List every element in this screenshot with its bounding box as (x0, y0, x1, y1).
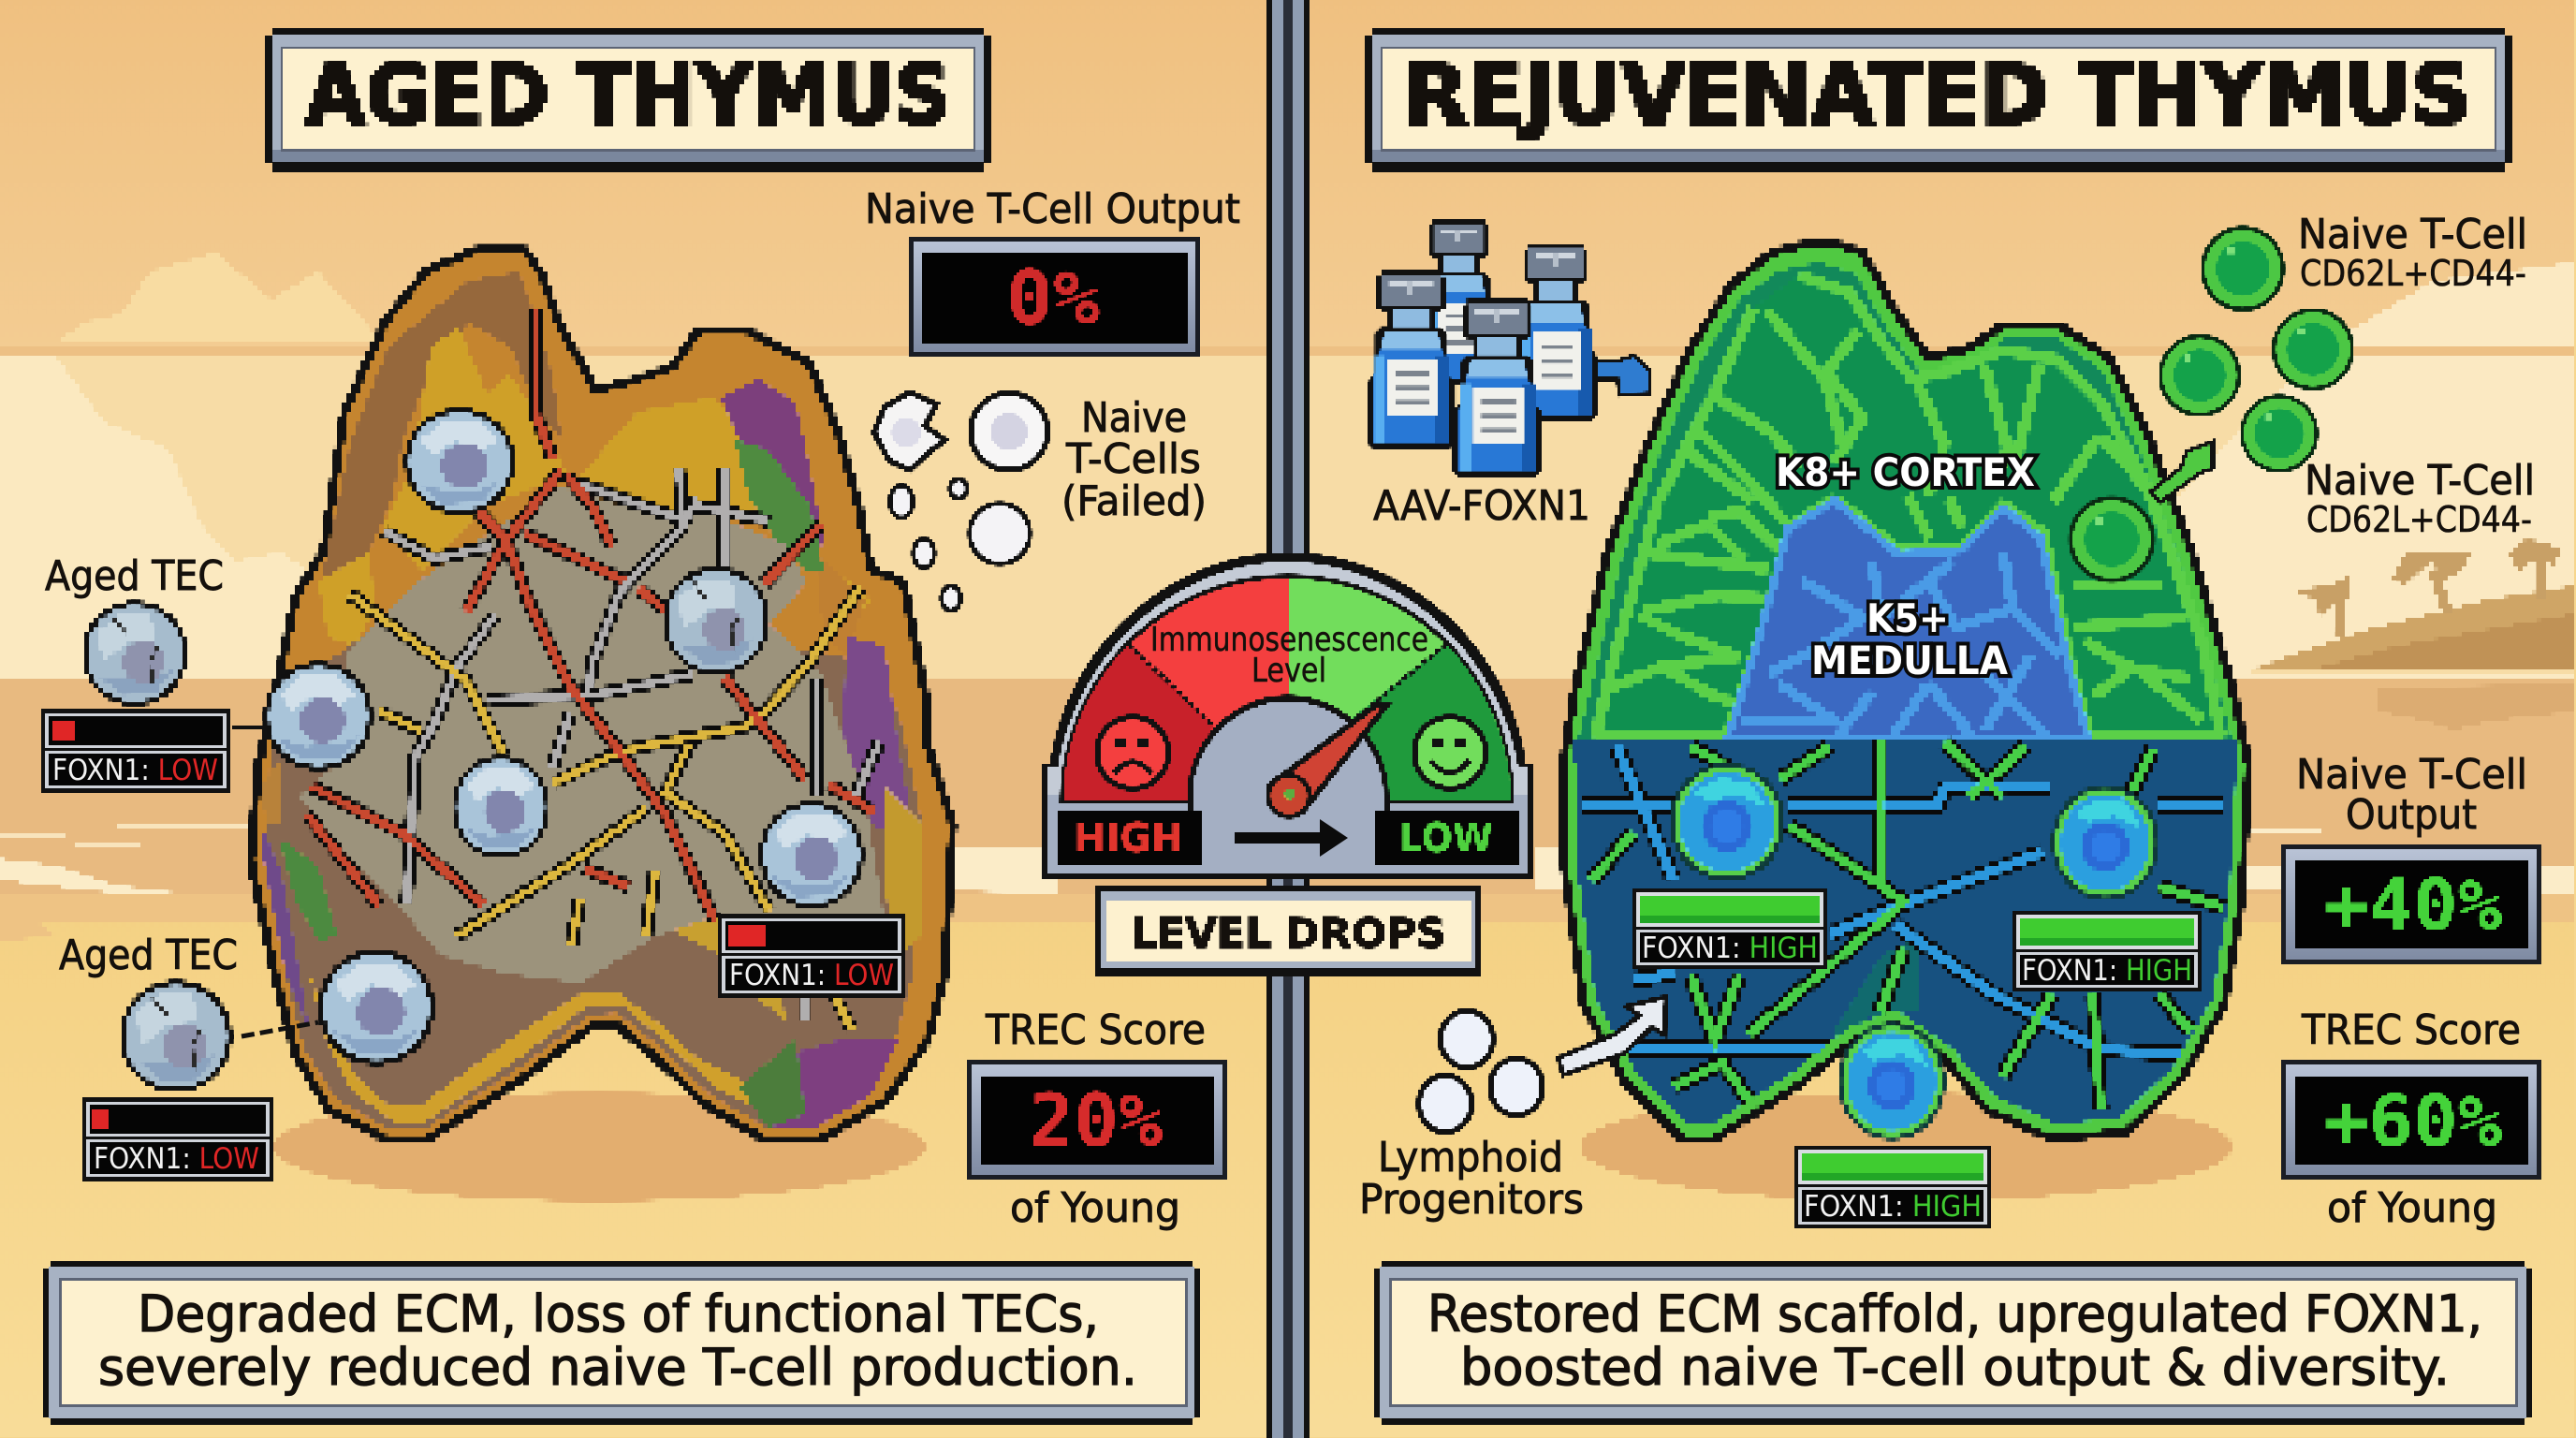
ECM fibers (307, 309, 879, 1030)
label: naive T-cell output (rejuvenated) (2296, 751, 2527, 839)
arrow: T-cell exit (2151, 442, 2213, 502)
badge: FOXN1 high B: FOXN1: HIGH (2022, 954, 2192, 988)
label: of young (aged): of Young (1010, 1184, 1180, 1232)
lower mauve-brown body (264, 599, 922, 1128)
title: aged thymus (265, 28, 991, 172)
label: TREC score (rejuvenated): TREC Score (2301, 1006, 2521, 1054)
label: K5+ medulla (1811, 595, 2008, 683)
icon: AAV vials (1367, 220, 1649, 477)
label: naive T-cell 1: Naive T-Cell (2298, 211, 2527, 258)
badge: FOXN1 high C: FOXN1: HIGH (1804, 1190, 1982, 1224)
title: rejuvenated thymus (1365, 28, 2512, 172)
icon: happy face (1414, 717, 1486, 788)
label: naive T-cells failed: T-Cells (1065, 435, 1201, 483)
badge: FOXN1 low B (82, 1097, 273, 1181)
rejuvenated TEC cells (1669, 763, 2159, 1140)
label: TREC score (aged): TREC Score (985, 1006, 1206, 1054)
badge: FOXN1 low A: FOXN1: LOW (52, 754, 218, 787)
level drops sign (1095, 886, 1481, 976)
label: gauge low: LOW (1399, 814, 1493, 862)
summary: aged: Degraded ECM, loss of functional TECs, (138, 1284, 1099, 1343)
label: naive T-cell 2: Naive T-Cell (2305, 457, 2535, 505)
label: AAV-FOXN1: AAV-FOXN1 (1373, 482, 1590, 530)
summary: aged (43, 1261, 1200, 1425)
badge: FOXN1 high B (2012, 911, 2202, 991)
readout: +60 percent: +60% (2324, 1079, 2502, 1163)
badge: FOXN1 high C (1794, 1146, 1991, 1228)
label: lymphoid progenitors: Lymphoid (1378, 1134, 1563, 1181)
label: K5+ medulla: MEDULLA (1811, 638, 2008, 683)
title: rejuvenated thymus: REJUVENATED THYMUS (1404, 47, 2471, 143)
label: naive T-cell output (aged): Naive T-Cell Output (865, 185, 1240, 233)
gauge text: Immunosenescence (1150, 621, 1428, 659)
top lobe patches (323, 271, 562, 627)
label: aged TEC top: Aged TEC (45, 552, 224, 600)
connector: aged TEC top (232, 726, 267, 729)
label: naive T-cell output (rejuvenated): Naive T-Cell (2296, 751, 2527, 799)
naive T-cells exiting (2069, 226, 2354, 582)
gauge needle (1268, 704, 1387, 816)
label: of young (rejuvenated): of Young (2327, 1184, 2497, 1232)
icon: aged TEC top (82, 601, 187, 706)
summary: rejuvenated: Restored ECM scaffold, upregulated FOXN1, (1427, 1284, 2482, 1343)
arrow: high to low (1235, 819, 1348, 857)
rejuvenated thymus organ (1563, 243, 2248, 1138)
label: naive T-cell 1 (2298, 211, 2527, 294)
badge: FOXN1 high A (1632, 888, 1827, 969)
cortex (1578, 262, 2232, 738)
medulla (1728, 501, 2087, 738)
label: K5+ medulla: K5+ (1866, 595, 1949, 641)
arrow: progenitor entry (1559, 997, 1666, 1075)
label: naive T-cell output (rejuvenated): Output (2346, 791, 2477, 839)
purple and green decay (721, 379, 824, 562)
gauge: immunosenescence level (1041, 552, 1534, 880)
label: naive T-cells failed (1061, 394, 1207, 525)
label: lymphoid progenitors: Progenitors (1359, 1176, 1584, 1224)
gray ECM core (300, 487, 885, 983)
center divider (1266, 0, 1310, 1438)
shadow: aged thymus (273, 1093, 925, 1201)
aged TEC cells in thymus (264, 408, 864, 1065)
readout: 20 percent (967, 1060, 1227, 1180)
gauge: immunosenescence level: Level (1251, 652, 1326, 690)
summary: rejuvenated (1374, 1261, 2532, 1425)
bottom lobes (1573, 740, 2239, 1123)
label: K8+ cortex: K8+ CORTEX (1776, 449, 2035, 495)
badge: FOXN1 low A (41, 709, 230, 793)
label: gauge high: HIGH (1074, 814, 1183, 862)
icon: sad face (1097, 717, 1168, 788)
lymphoid progenitors (1419, 1011, 1543, 1132)
aged thymus organ (251, 250, 953, 1139)
gauge hub (1187, 695, 1389, 824)
badge: FOXN1 low C: FOXN1: LOW (729, 959, 894, 992)
label: naive T-cells failed: (Failed) (1061, 477, 1207, 525)
badge: FOXN1 low C (718, 914, 905, 998)
readout: 20 percent: 20% (1030, 1079, 1163, 1164)
connector: aged TEC bottom (242, 1022, 318, 1036)
readout: +60 percent (2281, 1060, 2541, 1180)
label: naive T-cell 1: CD62L+CD44- (2300, 253, 2526, 294)
shadow: rejuvenated thymus (1581, 1093, 2232, 1201)
label: lymphoid progenitors (1359, 1134, 1584, 1224)
label: gauge low (1375, 811, 1519, 865)
readout: 0 percent: 0% (1006, 255, 1100, 342)
readout: 0 percent (909, 237, 1200, 357)
readout: +40 percent (2281, 844, 2541, 964)
summary: aged: severely reduced naive T-cell production. (98, 1338, 1137, 1397)
icon: aged TEC bottom (120, 980, 232, 1093)
summary: rejuvenated: boosted naive T-cell output & diversity. (1460, 1338, 2450, 1397)
label: naive T-cell 2: CD62L+CD44- (2306, 499, 2532, 540)
badge: FOXN1 high A: FOXN1: HIGH (1642, 932, 1818, 965)
label: naive T-cell 2 (2305, 457, 2535, 540)
label: naive T-cells failed: Naive (1081, 394, 1187, 442)
level drops sign: LEVEL DROPS (1131, 910, 1446, 958)
badge: FOXN1 low B: FOXN1: LOW (94, 1142, 259, 1176)
failed naive T-cells (874, 392, 1047, 610)
title: aged thymus: AGED THYMUS (305, 47, 951, 143)
readout: +40 percent: +40% (2324, 863, 2502, 946)
label: aged TEC bottom: Aged TEC (59, 932, 238, 979)
